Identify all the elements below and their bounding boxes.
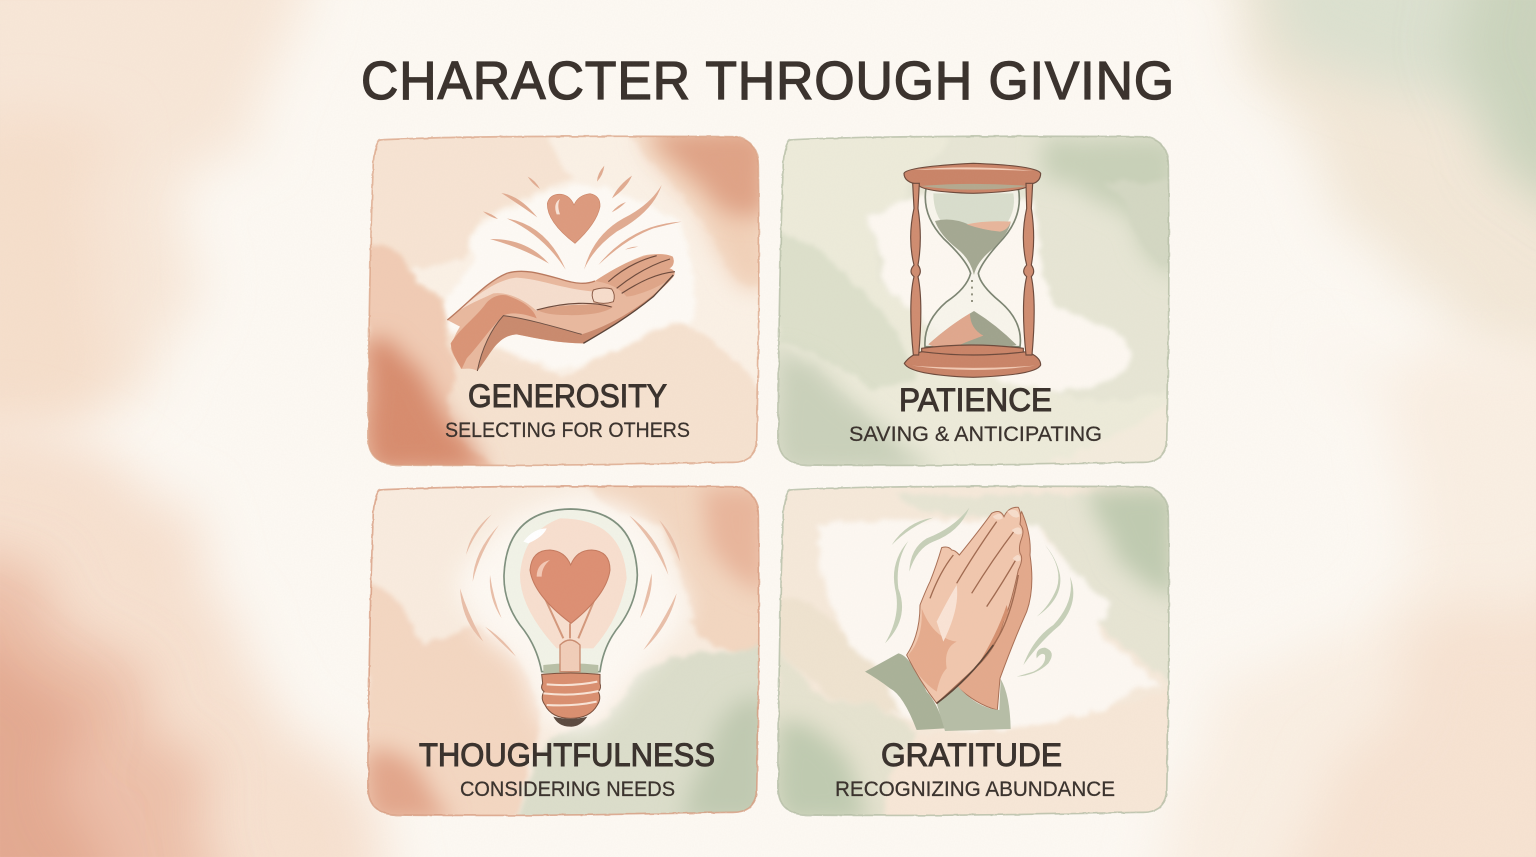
card border [778,136,1169,465]
icon: sage wisps [885,508,1073,677]
subheading: CONSIDERING NEEDS [460,778,675,801]
icon: praying hands [865,507,1032,731]
icon: hourglass [904,163,1041,377]
heading: PATIENCE [899,382,1052,418]
panel: generosity [360,125,770,475]
icon: light bulb with heart [504,509,637,727]
card border [368,136,759,465]
heading: THOUGHTFULNESS [419,737,715,773]
subheading: RECOGNIZING ABUNDANCE [835,778,1115,801]
icon: open hand [447,254,675,371]
card border [368,486,759,815]
panel: gratitude [770,475,1180,825]
glass [925,188,1020,350]
panel: thoughtfulness [360,475,770,825]
frame top and base [904,163,1041,377]
subheading: SAVING & ANTICIPATING [849,423,1102,446]
panel: patience [770,125,1180,475]
columns [911,183,1034,355]
subheading: SELECTING FOR OTHERS [445,419,690,442]
card border [778,486,1169,815]
heading: GRATITUDE [881,737,1062,773]
heading: GENEROSITY [468,378,667,414]
title: CHARACTER THROUGH GIVING [361,51,1175,111]
icon: light rays [460,514,680,657]
icon: heart with rays [483,166,682,270]
